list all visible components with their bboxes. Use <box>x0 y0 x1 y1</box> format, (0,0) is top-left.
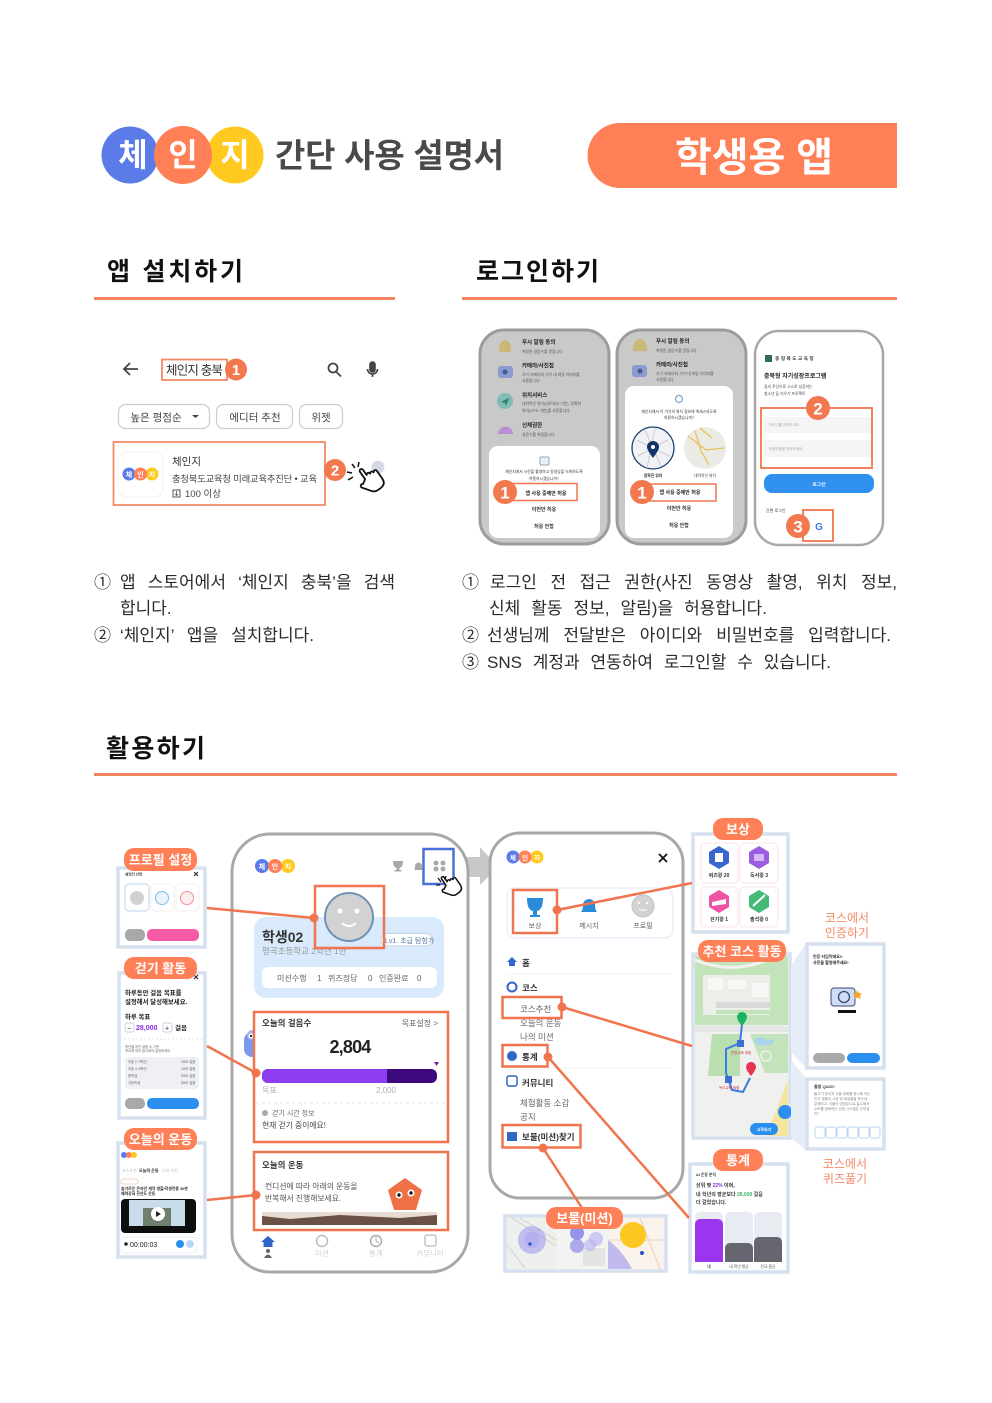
shortcut card: 프로필 <box>633 921 653 930</box>
app result card: 충청북도교육청 미래교육추진단 • 교육 <box>172 474 317 484</box>
text block: app install steps <box>94 573 395 645</box>
app result card: 체 <box>126 470 132 479</box>
panel: 퀴즈 화면: 분해하고, 식물이 영양분으로 흡수해서 <box>814 1101 869 1106</box>
location dialog: 정확한 위치 <box>644 473 663 478</box>
answer boxes <box>815 1127 880 1138</box>
permission list: 사용합니다. <box>522 378 541 383</box>
permission list: 측정된 걸음수를 알립니다. <box>522 349 564 354</box>
permission list: 카메라/사진첩 <box>656 360 688 368</box>
screenshot content: 28,000 <box>136 1025 158 1032</box>
screenshot content: 8000 걸음 <box>181 1080 195 1085</box>
reward badges: 퀴즈왕 20 <box>709 872 730 879</box>
app result card: 지 <box>149 470 155 479</box>
location dialog: 앱 사용 중에만 허용 <box>660 489 701 496</box>
shortcut card <box>507 888 673 938</box>
location dialog: 이번만 허용 <box>667 505 692 512</box>
menu list: 코스 <box>522 983 538 993</box>
label: 프로필 설정 <box>124 848 197 871</box>
screenshot content: 중학생 <box>128 1073 137 1078</box>
highlight box <box>642 484 716 501</box>
icon: menu grid <box>434 860 446 872</box>
profile card: 0 <box>368 974 373 983</box>
profile card: 학생02 <box>262 929 304 945</box>
app result card: 100 이상 <box>185 489 221 500</box>
reward badges: 독서왕 3 <box>750 872 768 879</box>
menu list: 홈 <box>522 958 530 968</box>
profile card: Lv1. 초급 탐험가 <box>385 936 435 945</box>
program title: 충북형 자기성장프로그램 <box>764 372 826 380</box>
bar chart: 내 학년 평균 <box>729 1264 749 1269</box>
panel: 퀴즈 화면: 수조를 정화하는 순환 시스템은 무엇일 <box>814 1106 869 1111</box>
bar chart: 전국 평균 <box>760 1264 776 1269</box>
icon: search <box>328 364 341 376</box>
bottom navigation: 통계 <box>369 1248 383 1258</box>
steps card: 목표 <box>262 1086 277 1095</box>
label: 오늘의 운동 <box>124 1128 197 1150</box>
profile card: 인증완료 <box>379 973 408 983</box>
panel: 인증 화면: 인증 타임이에요!! <box>813 953 843 959</box>
permission dialog: 체인지에서 사진을 촬영하고 동영상을 녹화하도록 <box>505 469 583 474</box>
panel: 통계: 더 걸었습니다. <box>696 1199 727 1206</box>
logo: 체인지 <box>102 126 264 184</box>
panel: 퀴즈 화면: 불고기 양식과 식물 재배를 동시에 하는 <box>814 1091 871 1096</box>
label: 프로필 설정: 프로필 설정 <box>129 852 192 868</box>
label: 통계: 통계 <box>726 1153 750 1168</box>
input fields: 비밀번호를 입력하세요. <box>769 446 803 451</box>
screenshot content: 2000 걸음 <box>181 1059 195 1064</box>
screenshot content: 설정해서 달성해보세요. <box>125 997 188 1006</box>
label: 보상 <box>713 818 763 840</box>
today's exercise card: 오늘의 운동 <box>262 1160 304 1170</box>
permission list <box>497 338 582 437</box>
course map: 시작하기 <box>757 1126 772 1132</box>
bottom navigation: 커뮤니티 <box>416 1249 444 1258</box>
screenshot content: 6000 걸음 <box>181 1073 195 1078</box>
screenshot content: − <box>127 1026 131 1032</box>
panel: 퀴즈 화면 <box>807 1079 884 1149</box>
logo: 체 <box>259 862 265 871</box>
screenshot content: 초등 4~6학년 <box>128 1066 147 1071</box>
logo <box>255 859 295 873</box>
caption: 코스에서 퀴즈풀기: 퀴즈풀기 <box>823 1172 867 1186</box>
panel: 프로필 설정 <box>118 868 205 947</box>
menu highlights <box>502 997 580 1148</box>
steps card: 오늘의 걸음수 <box>262 1018 311 1028</box>
screenshot content <box>120 975 204 1109</box>
step badge 2: 2 <box>331 462 339 480</box>
panel: login phone 1 <box>480 330 609 544</box>
profile card: 평곡초등학교 2학년 1반 <box>262 946 347 956</box>
steps card: 2,804 <box>329 1037 371 1057</box>
program description: 청소년 꿈 키우기 프로젝트 <box>764 391 806 396</box>
reward badges <box>701 843 778 927</box>
label: 보물(미션) <box>546 1207 623 1229</box>
text block: login steps: 선생님께 전달받은 아이디와 비밀번호를 입력합니다. <box>487 626 891 645</box>
icon: back arrow <box>124 363 138 375</box>
screenshot content: 나의 미션 <box>162 1167 178 1173</box>
permission dialog: 앱 사용 중에만 허용 <box>526 490 567 497</box>
menu list <box>507 957 672 1142</box>
logo: 지 <box>285 862 291 871</box>
course map: 안전교육 체험 <box>731 1050 751 1055</box>
permission list: 기기 카메라와 기기 내 파일 이미지를 <box>522 372 580 377</box>
label: 추천 코스 활동 <box>698 940 786 962</box>
panel: 통계: 내 학년의 평균보다 28,000 걸음 <box>696 1191 763 1198</box>
permission list <box>632 337 714 382</box>
app result card: 체인지 <box>172 456 201 468</box>
panel: 퀴즈 화면: 친식 생물이 시공 및 배설물을 하는데 <box>814 1096 867 1101</box>
screenshot content: 학년별 추천 걸음 수 기준 <box>125 1044 159 1049</box>
panel: 통계: 상위 몇 22% 이며, <box>696 1182 735 1189</box>
menu list: 코스추천 <box>520 1004 551 1014</box>
step badge 3 <box>786 514 810 538</box>
bar chart <box>695 1212 782 1269</box>
blue mascot <box>244 1030 270 1057</box>
profile card: 1 <box>317 974 322 983</box>
logo: 체인지: 체 <box>118 137 148 173</box>
permission list: 카메라/사진첩 <box>522 362 554 370</box>
heading: 앱 설치하기: 앱 설치하기 <box>107 258 243 286</box>
heading: 활용하기 <box>94 735 897 776</box>
permission dialog: 허용 안함 <box>534 523 554 530</box>
menu list: 통계 <box>522 1052 538 1062</box>
screenshot content: + <box>165 1026 169 1032</box>
bottom navigation: 미션 <box>315 1248 329 1258</box>
logo: 체인지: 지 <box>220 137 250 173</box>
steps card: 목표설정 > <box>402 1018 438 1028</box>
filter chips <box>118 404 342 428</box>
label: 통계 <box>713 1149 763 1171</box>
label: 오늘의 운동: 오늘의 운동 <box>129 1132 192 1147</box>
permission dialog: 허용하시겠습니까? <box>529 476 559 481</box>
location dialog: 체인지에서 이 기기의 위치 정보에 액세스하도록 <box>641 409 717 414</box>
logo: 체인지: 인 <box>168 137 198 173</box>
text block: login steps: ① <box>462 573 479 592</box>
location dialog: 허용 안함 <box>669 522 689 529</box>
screenshot content: 학교에 따라 참고하여 설정하세요 <box>125 1048 170 1053</box>
step badge 1: 1 <box>500 484 510 502</box>
screenshot content <box>120 1152 197 1253</box>
panel: play store search <box>114 358 386 505</box>
label: 보물(미션): 보물(미션) <box>556 1211 613 1226</box>
steps card: 2,000 <box>376 1086 397 1095</box>
step badge 2: 2 <box>813 400 823 418</box>
permission list: 대략적인 위치(네트워크 기반), 정확한 <box>522 401 582 406</box>
profile card: 퀴즈정답 <box>328 973 358 983</box>
avatar highlight <box>315 886 384 948</box>
google button <box>803 510 833 541</box>
text block: app install steps: 합니다. <box>120 599 172 618</box>
panel: 퀴즈 화면: 돌발 QUIZ!! <box>814 1083 835 1089</box>
fan connector: course map to photo and quiz panels <box>791 943 806 1150</box>
text block: app install steps: ② <box>94 626 111 645</box>
permission list: 푸시 알림 동의 <box>522 338 555 346</box>
permission list: 위치(GPS 기반)를 사용합니다. <box>522 408 571 413</box>
text block: login steps <box>462 573 897 672</box>
step badge 1: 1 <box>232 362 240 379</box>
reward highlight <box>513 890 557 933</box>
text block: app install steps: ‘체인지’ 앱을 설치합니다. <box>120 626 314 645</box>
text block: login steps: ③ <box>462 653 479 672</box>
panel: login phone 3 <box>755 331 883 545</box>
bar chart: 내 <box>707 1264 711 1269</box>
filter chips: 높은 평점순 <box>130 412 182 424</box>
text block: app install steps: ① <box>94 573 111 592</box>
panel: 추천 코스 활동 <box>693 954 792 1138</box>
badge: 학생용 앱: 학생용 앱 <box>675 136 833 180</box>
login button <box>764 474 874 493</box>
shortcut card: 메시지 <box>579 921 599 930</box>
screenshot content: 00:00:03 <box>130 1242 157 1249</box>
screenshot content: 고등학생 <box>128 1080 140 1085</box>
icon: camera <box>831 988 862 1013</box>
step badge 1 <box>493 480 517 504</box>
education office logo: 충청북도교육청 <box>775 355 815 362</box>
location dialog: 대략적인 위치 <box>694 473 716 478</box>
permission dialog: 이번만 허용 <box>532 506 557 513</box>
panel: 퀴즈 화면: 까? <box>814 1111 819 1116</box>
panel: 인증 화면 <box>807 944 884 1068</box>
course map <box>695 956 792 1136</box>
search box: 체인지 충북 <box>166 364 223 378</box>
caption: 코스에서 퀴즈풀기: 코스에서 <box>823 1157 867 1171</box>
screenshot content: 초등 1~3학년 <box>128 1059 147 1064</box>
caption: 코스에서 인증하기: 코스에서 <box>825 911 869 925</box>
screenshot content: 4000 걸음 <box>181 1066 195 1071</box>
label: 보상: 보상 <box>726 822 750 837</box>
badge: 학생용 앱 <box>588 123 897 188</box>
screenshot content: 걸음 <box>175 1023 187 1032</box>
steps card: 현재 걷기 중이에요! <box>262 1120 326 1130</box>
text block: login steps: SNS 계정과 연동하여 로그인할 수 있습니다. <box>487 653 831 672</box>
label: 추천 코스 활동: 추천 코스 활동 <box>703 944 782 959</box>
step badge 2 <box>806 396 830 420</box>
permission list: 측정된 걸음수를 알립니다. <box>656 348 698 353</box>
steps card <box>254 1012 448 1142</box>
heading: 로그인하기 <box>462 258 897 300</box>
permission list: 사용합니다. <box>656 377 675 382</box>
screenshot content: 체력강화 한산도 운동 <box>121 1191 156 1196</box>
text block: login steps: ② <box>462 626 479 645</box>
today's exercise card <box>254 1152 448 1230</box>
bottom navigation <box>261 1235 444 1258</box>
heading: 앱 설치하기 <box>94 258 395 300</box>
profile card: 미션수행 <box>277 973 306 983</box>
today's exercise card: 컨디션에 따라 아래의 운동을 <box>265 1181 358 1191</box>
profile card <box>254 917 444 998</box>
step badge 1 <box>630 480 654 504</box>
filter chips: 에디터 추천 <box>229 412 281 424</box>
heading: 활용하기: 활용하기 <box>106 735 205 763</box>
label: 걷기 활동: 걷기 활동 <box>135 961 186 976</box>
icon: close <box>659 854 667 862</box>
location dialog: 허용하시겠습니까? <box>664 415 694 420</box>
reward badges: 걷기왕 1 <box>710 916 728 923</box>
text block: login steps: 로그인 전 접근 권한(사진 동영상 촬영, 위치 정보, <box>490 573 897 592</box>
menu highlight <box>424 849 454 884</box>
menu list: 나의 미션 <box>520 1032 554 1042</box>
panel: 보상 <box>693 834 788 932</box>
title: 간단 사용 설명서 <box>275 137 504 174</box>
connectors: home screen <box>207 908 318 1200</box>
permission list: 기기 카메라와 기기 내 파일 이미지를 <box>656 371 714 376</box>
icon: tap hand <box>435 871 464 900</box>
panel: 통계 <box>690 1164 788 1272</box>
permission list: 걸음수를 측정합니다. <box>522 432 556 437</box>
profile card: 0 <box>417 974 422 983</box>
permission dialog <box>489 446 600 538</box>
easy login label: 간편 로그인 <box>766 507 786 513</box>
text block: login steps: 신체 활동 정보, 알림)을 허용합니다. <box>489 599 767 618</box>
panel: 보물(미션) <box>505 1216 666 1271</box>
logo: 지 <box>534 853 540 862</box>
logo: 인 <box>522 853 528 862</box>
today's exercise card: 반복해서 진행해보세요. <box>265 1193 341 1203</box>
screenshot content: 캐릭터 선택 <box>125 872 142 876</box>
panel: login phone 2 <box>617 330 746 544</box>
google button: G <box>815 522 823 533</box>
highlight box <box>761 408 872 468</box>
input fields <box>764 417 871 457</box>
step badge 1 <box>225 358 247 380</box>
menu list: 체험활동 소감 <box>520 1098 569 1108</box>
app result card: 인 <box>137 470 144 479</box>
location dialog <box>625 386 733 538</box>
filter chips: 위젯 <box>311 411 331 424</box>
program description <box>764 384 813 396</box>
panel: 인증 화면: 사진을 촬영해주세요! <box>813 959 849 965</box>
shortcut card: 보상 <box>529 921 542 930</box>
caption: 코스에서 인증하기: 인증하기 <box>825 926 869 940</box>
course map: 독도교육 체험 <box>719 1085 739 1090</box>
permission list: 위치서비스 <box>522 391 547 399</box>
logo <box>506 850 544 864</box>
menu list: 보물(미션)찾기 <box>522 1132 575 1142</box>
caption: 코스에서 인증하기 <box>825 911 869 940</box>
screenshot content: 오늘의 운동 <box>139 1167 159 1173</box>
treasure map <box>507 1218 664 1269</box>
program description: 길의 주인으로 스스로 성장하는 <box>764 384 813 389</box>
screenshot content: 하루동안 걸음 목표를 <box>125 988 182 997</box>
panel: main phone home screen <box>232 834 468 1272</box>
caption: 코스에서 퀴즈풀기 <box>823 1157 867 1186</box>
text block: app install steps: 앱 스토어에서 ‘체인지 충북’을 검색 <box>120 573 395 592</box>
education office logo <box>765 355 815 362</box>
arrow between phones <box>455 847 498 885</box>
logo: 체 <box>510 853 516 862</box>
app result card <box>114 442 325 505</box>
reward badges: 출석왕 0 <box>750 916 768 923</box>
permission list: 푸시 알림 동의 <box>656 337 689 345</box>
menu list: 공지 <box>520 1112 536 1122</box>
highlight box <box>505 484 577 500</box>
panel: side menu phone <box>490 833 683 1198</box>
icon: tap hand <box>347 460 386 497</box>
heading: 로그인하기: 로그인하기 <box>476 258 599 286</box>
search box <box>162 360 227 380</box>
panel: 오늘의 운동 <box>118 1143 205 1257</box>
permission list: 신체권한 <box>522 421 542 429</box>
panel: 걷기 활동 <box>119 973 205 1118</box>
connectors: side menu <box>538 883 692 1218</box>
step badge 3: 3 <box>793 518 803 536</box>
steps card: 걷기 시간 정보 <box>272 1108 315 1118</box>
icons: trophy and bell <box>393 861 423 872</box>
screenshot content: 하루 목표 <box>125 1012 150 1021</box>
input fields: 아이디를 입력하세요. <box>769 422 800 427</box>
menu list: 오늘의 운동 <box>520 1018 562 1028</box>
label: 걷기 활동 <box>124 957 197 979</box>
step badge 1: 1 <box>637 484 647 502</box>
logo: 인 <box>272 862 278 871</box>
icon: microphone <box>368 362 378 377</box>
menu list: 커뮤니티 <box>522 1078 553 1088</box>
step badge 2 <box>324 459 346 481</box>
screenshot content: 코스추천 <box>122 1167 137 1173</box>
panel: 통계: AI 운동 분석 <box>696 1172 716 1177</box>
screenshot content: 슬기로운 온라인 계약 생활/학생전용 30분 <box>121 1186 188 1191</box>
login button: 로그인 <box>812 481 826 488</box>
